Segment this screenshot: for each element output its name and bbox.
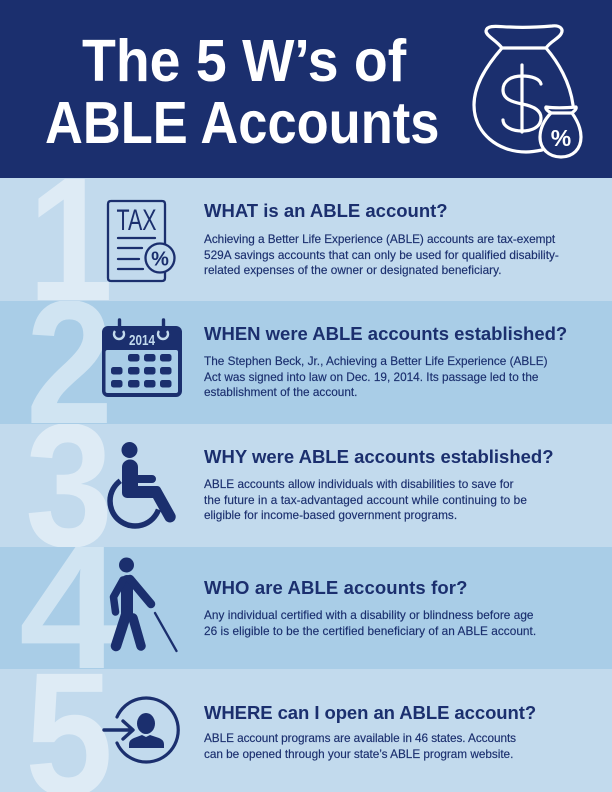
title: The 5 W’s of xyxy=(82,28,406,94)
text: where: ABLE account programs are available in 46 states. Accounts xyxy=(204,731,516,745)
panel: who xyxy=(0,547,612,670)
text: what: related expenses of the owner or designated beneficiary. xyxy=(204,263,502,277)
icon: wheelchair xyxy=(107,442,176,529)
title: ABLE Accounts xyxy=(45,90,439,156)
icon: tax document: % xyxy=(151,248,169,270)
heading: where: WHERE can I open an ABLE account? xyxy=(204,702,536,723)
panel: when xyxy=(0,301,612,424)
icon: calendar xyxy=(102,318,182,397)
heading: why: WHY were ABLE accounts established? xyxy=(204,446,554,467)
icon: person with cane xyxy=(110,558,178,652)
percent sign on small bag: % xyxy=(551,125,571,151)
icon: tax document xyxy=(106,200,176,282)
text: when: The Stephen Beck, Jr., Achieving a Better Life Experience (ABLE) xyxy=(204,354,548,368)
text: what: Achieving a Better Life Experience (ABLE) accounts are tax-exempt xyxy=(204,232,555,246)
text: who: Any individual certified with a disability or blindness before age xyxy=(204,608,534,622)
text: why: the future in a tax-advantaged account while continuing to be xyxy=(204,493,527,507)
heading: when: WHEN were ABLE accounts established? xyxy=(204,323,567,344)
panel: where xyxy=(0,669,612,792)
icon: calendar: 2014 xyxy=(129,332,156,349)
heading: who: WHO are ABLE accounts for? xyxy=(204,577,468,598)
title xyxy=(45,28,439,156)
icon: money bag xyxy=(472,24,583,159)
text: when xyxy=(204,354,548,399)
panel: why xyxy=(0,424,612,547)
heading: what: WHAT is an ABLE account? xyxy=(204,200,448,221)
text: what xyxy=(204,232,559,277)
icon: tax document: TAX xyxy=(116,204,156,237)
text: when: establishment of the account. xyxy=(204,385,357,399)
text: where: can be opened through your state’s ABLE program website. xyxy=(204,747,513,761)
text: why: ABLE accounts allow individuals with disabilities to save for xyxy=(204,477,514,491)
text: who: 26 is eligible to be the certified beneficiary of an ABLE account. xyxy=(204,624,536,638)
text: when: Act was signed into law on Dec. 19, 2014. Its passage led to the xyxy=(204,370,538,384)
icon: person with entry arrow xyxy=(102,696,180,764)
text: why xyxy=(204,477,527,522)
text: who xyxy=(204,608,536,638)
text: where xyxy=(204,731,516,761)
panel: what xyxy=(0,178,612,301)
header banner xyxy=(0,0,612,178)
text: what: 529A savings accounts that can only be used for qualified disability- xyxy=(204,248,559,262)
text: why: eligible for income-based government programs. xyxy=(204,508,457,522)
